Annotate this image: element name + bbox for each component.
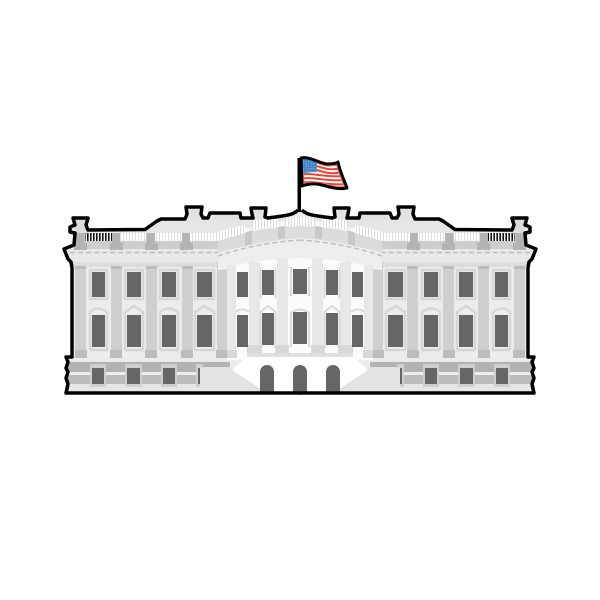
icon: American flag	[300, 156, 348, 189]
illustration: White House with flag	[62, 156, 538, 395]
building: left wing and central portico	[60, 200, 301, 395]
building: right wing and central portico	[299, 200, 540, 395]
flagpole	[298, 158, 301, 212]
